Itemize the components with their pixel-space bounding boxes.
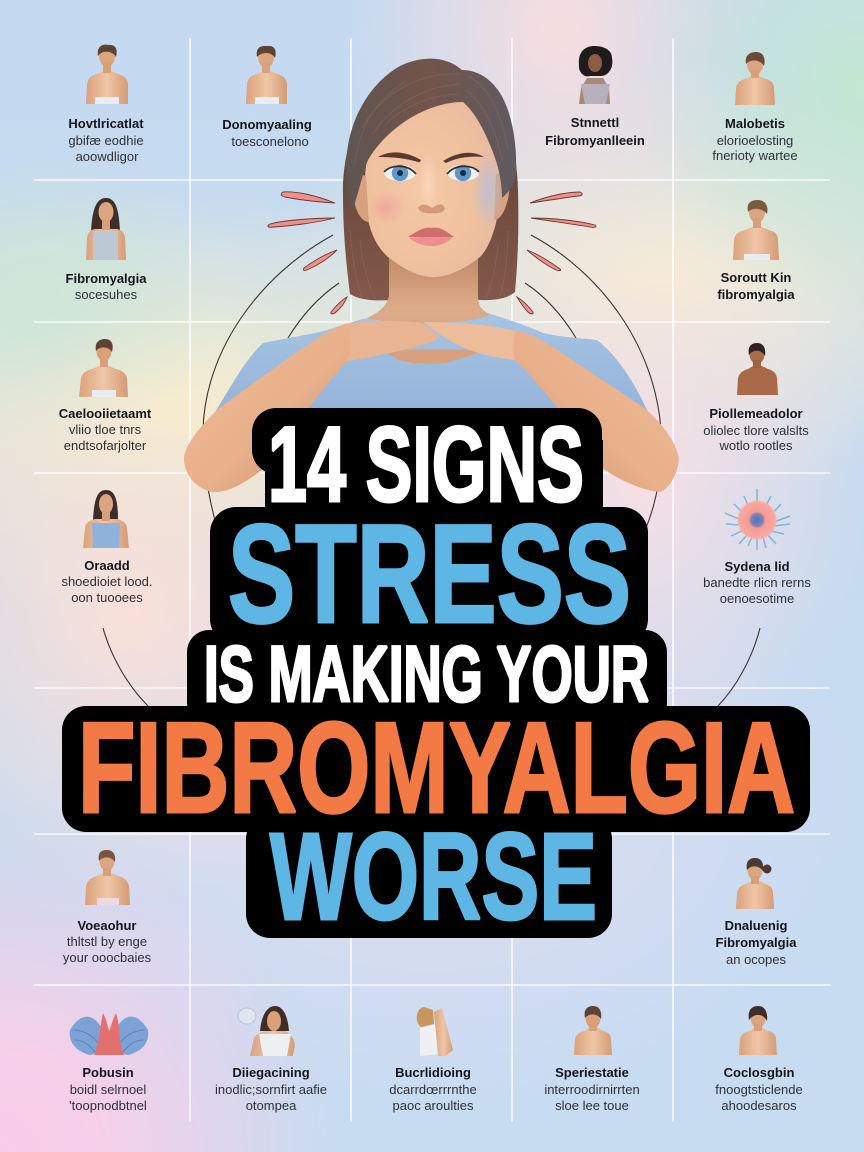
curved guide arcs xyxy=(103,235,760,706)
label 7: vliio tloe tnrs xyxy=(69,422,142,437)
hair back xyxy=(343,100,518,300)
figure 14 xyxy=(238,1006,295,1056)
label 9: Oraadd xyxy=(84,558,130,573)
figure 7 xyxy=(79,339,128,397)
figure 8 xyxy=(737,343,778,395)
label 10: Sydena lid xyxy=(724,559,790,574)
label 9 xyxy=(61,558,153,605)
label 15 xyxy=(389,1065,477,1113)
label 4: elorioelosting xyxy=(717,133,793,148)
title line: IS MAKING YOUR: IS MAKING YOUR xyxy=(204,629,649,718)
figure 17 xyxy=(739,1006,777,1055)
label 11: thltstl by enge xyxy=(67,934,147,949)
label 2 xyxy=(222,117,312,149)
label 7 xyxy=(59,406,152,453)
label 10 xyxy=(703,559,811,606)
label 5 xyxy=(66,271,147,302)
label 13: boidl selrnoel xyxy=(70,1082,146,1097)
label 12: Fibromyalgia xyxy=(716,935,797,950)
figure 12 xyxy=(736,858,774,909)
left hand xyxy=(345,321,440,361)
label 9: oon tuooees xyxy=(71,590,143,605)
label 12: Dnaluenig xyxy=(725,918,787,933)
lower hand xyxy=(386,349,478,364)
label 3: Stnnettl xyxy=(571,115,619,130)
label 15: Bucrlidioing xyxy=(395,1065,471,1080)
label 11: your ooocbaies xyxy=(63,950,152,965)
label 16 xyxy=(544,1065,640,1113)
label 14: otompea xyxy=(246,1098,297,1113)
label 6: fibromyalgia xyxy=(717,287,795,302)
label 13 xyxy=(69,1065,147,1113)
title xyxy=(62,404,810,946)
label 4 xyxy=(712,116,798,163)
nose highlight xyxy=(418,153,438,217)
label 17: Coclosgbin xyxy=(724,1065,794,1080)
face xyxy=(365,100,500,277)
icon: muscle fibres xyxy=(70,1013,148,1055)
cheek blush xyxy=(368,190,406,224)
label 13: 'toopnodbtnel xyxy=(69,1098,147,1113)
label 17: ahoodesaros xyxy=(721,1098,797,1113)
label 4: fnerioty wartee xyxy=(712,148,798,163)
hair top xyxy=(346,59,516,212)
mouth xyxy=(408,228,454,246)
ears xyxy=(353,173,509,222)
figure 2 xyxy=(246,46,287,104)
label 11: Voeaohur xyxy=(78,918,136,933)
black outline behind title xyxy=(62,408,810,938)
label 14 xyxy=(215,1065,327,1113)
title line: 14 SIGNS: 14 SIGNS xyxy=(268,404,584,524)
label 6 xyxy=(717,270,795,302)
label 4: Malobetis xyxy=(725,116,785,131)
label 2: toesconelono xyxy=(231,134,309,149)
label 15: paoc aroulties xyxy=(393,1098,474,1113)
label 1: aoowdligor xyxy=(76,149,139,164)
figure 15 xyxy=(417,1007,453,1056)
label 12: an ocopes xyxy=(726,952,786,967)
left arm xyxy=(184,323,353,492)
figure 4 xyxy=(735,52,775,105)
label 8: wotlo rootles xyxy=(719,438,793,453)
label 10: banedte rlicn rerns xyxy=(703,575,811,590)
label 16: sloe lee toue xyxy=(555,1098,629,1113)
label 8: Piollemeadolor xyxy=(709,406,803,421)
illustration: woman with hands together xyxy=(184,59,679,530)
right hand xyxy=(424,322,515,360)
label 12 xyxy=(716,918,797,967)
label 13: Pobusin xyxy=(82,1065,134,1080)
label 15: dcarrdœrrrnthe xyxy=(389,1082,477,1097)
face sheen xyxy=(471,150,505,230)
label 14: inodlic;sornfirt aafie xyxy=(215,1082,327,1097)
label 11 xyxy=(63,918,152,965)
label 1: Hovtlricatlat xyxy=(68,116,144,131)
icon: nerve burst xyxy=(725,489,790,550)
title line: STRESS: STRESS xyxy=(228,495,631,652)
label 16: Speriestatie xyxy=(555,1065,629,1080)
label 7: Caelooiietaamt xyxy=(59,406,152,421)
right arm xyxy=(512,330,679,492)
figure 6 xyxy=(733,200,779,260)
figure 3 xyxy=(579,46,612,104)
label 10: oenoesotime xyxy=(720,591,794,606)
label 8: oliolec tlore valslts xyxy=(703,423,809,438)
label 16: interroodirnirrten xyxy=(544,1082,640,1097)
eyes xyxy=(384,165,479,181)
eyebrows xyxy=(378,152,484,163)
label 3 xyxy=(545,115,645,148)
label 8 xyxy=(703,406,809,453)
label 17 xyxy=(715,1065,803,1113)
figure 11 xyxy=(85,850,130,905)
label 9: shoedioiet lood. xyxy=(61,574,153,589)
label 14: Diiegacining xyxy=(232,1065,310,1080)
figure 9 xyxy=(83,490,129,548)
label 5: socesuhes xyxy=(75,287,138,302)
hair strands xyxy=(355,74,508,165)
neck xyxy=(360,250,500,345)
lower hair strands xyxy=(350,230,508,298)
label 1: gbifæ eodhie xyxy=(68,133,144,148)
nose xyxy=(418,205,445,213)
label 6: Soroutt Kin xyxy=(721,270,791,285)
blue shirt xyxy=(215,314,647,530)
pain rays around the head xyxy=(268,192,596,314)
figure 5 xyxy=(86,198,126,260)
label 1 xyxy=(68,116,144,164)
label 3: Fibromyanlleein xyxy=(545,133,645,148)
figure 16 xyxy=(574,1006,612,1055)
label 17: fnoogtsticlende xyxy=(715,1082,803,1097)
label 5: Fibromyalgia xyxy=(66,271,147,286)
label 7: endtsofarjolter xyxy=(64,438,147,453)
title line: WORSE: WORSE xyxy=(270,809,597,946)
figure 1 xyxy=(86,45,128,104)
label 2: Donomyaaling xyxy=(222,117,312,132)
